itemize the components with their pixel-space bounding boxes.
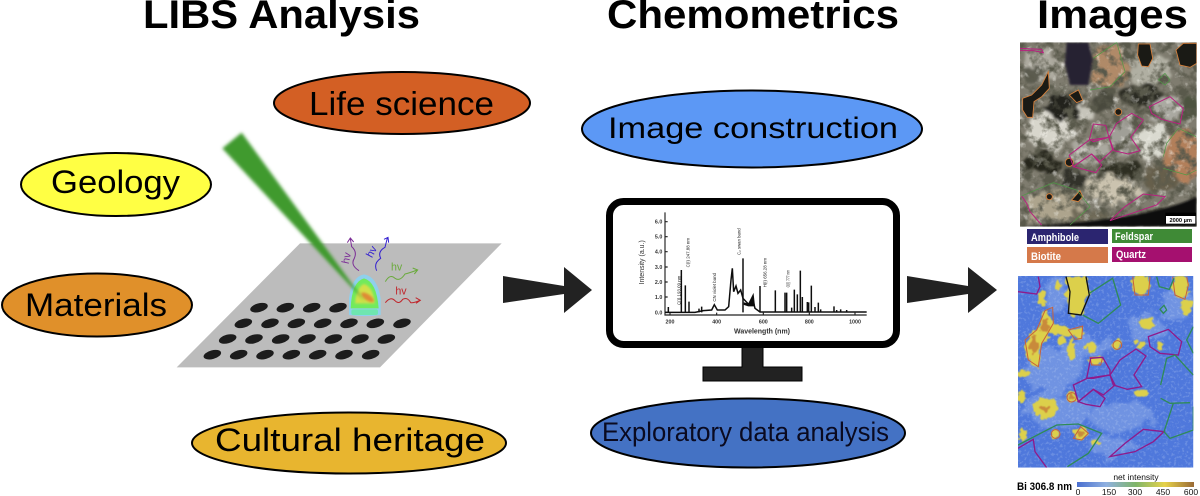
axis numbers: 3.0	[655, 265, 662, 271]
peak labels: H(I) 656.28 nm	[762, 258, 768, 287]
quartz outlines	[1020, 48, 1183, 225]
axis numbers	[655, 220, 861, 326]
sample plate	[177, 243, 502, 367]
monitor stand	[703, 346, 802, 381]
peak labels: C(I) 247.88 nm	[686, 238, 692, 267]
axes	[665, 212, 867, 315]
photo mottling	[1020, 42, 1197, 227]
oval: Life science	[274, 72, 530, 134]
elemental intensity map	[1018, 274, 1193, 468]
feldspar outlines	[1022, 42, 1197, 225]
oval: Materials	[2, 274, 192, 336]
emission: hv green	[385, 261, 418, 282]
high intensity hot spots	[1018, 274, 1193, 444]
LIBS spectrum chart: Intensity (a.u.)	[639, 240, 646, 284]
hot spot cores	[1030, 319, 1084, 436]
legend: mineral classes	[1027, 229, 1192, 263]
spectrum trace	[665, 258, 867, 312]
legend: Biotite	[1027, 247, 1108, 263]
legend: Feldspar	[1112, 229, 1192, 243]
gradient bar	[1077, 482, 1194, 487]
ablation craters	[203, 301, 412, 361]
feldspar outlines	[1018, 277, 1193, 467]
dark amphibole patch	[1065, 42, 1093, 85]
oval: Exploratory data analysis: Exploratory data analysis	[602, 417, 889, 447]
photo tone patches	[1022, 47, 1200, 223]
emission: hv purple	[340, 238, 359, 271]
peak labels: O(I) 777 nm	[785, 270, 791, 287]
amphibole outline	[1066, 277, 1089, 315]
axis numbers: 800	[805, 320, 814, 326]
oval: Exploratory data analysis	[591, 398, 905, 468]
axis numbers: 2.0	[655, 280, 662, 286]
scale ticks	[1076, 487, 1198, 496]
emission: hv blue	[364, 237, 389, 271]
biotite grains	[1023, 43, 1197, 202]
LIBS illustration: sample plate with laser and plasma	[177, 133, 502, 367]
legend: Amphibole	[1027, 229, 1108, 244]
axis numbers: 6.0	[655, 220, 662, 226]
lighter scatter regions	[1023, 277, 1193, 456]
computer monitor with spectrum	[610, 202, 896, 381]
mineral photograph with outlines	[1020, 42, 1200, 227]
biotite outlines	[1025, 277, 1188, 440]
emission: hv green: hv	[391, 261, 403, 273]
oval: Geology: Geology	[51, 164, 180, 200]
quartz outlines	[1018, 277, 1182, 468]
peak labels: C₂ swan band	[737, 228, 743, 255]
element label: Bi 306.8 nm	[1017, 481, 1072, 493]
plasma plume	[349, 274, 381, 316]
image corner shadow	[1020, 197, 1197, 227]
speckle texture	[1018, 276, 1193, 468]
LIBS spectrum chart	[639, 212, 867, 335]
axis numbers: 0.0	[655, 310, 662, 316]
axis numbers: 200	[666, 320, 674, 326]
dark mineral mottling	[1020, 42, 1197, 227]
axis numbers: 600	[759, 320, 768, 326]
arrow: LIBS to chemometrics	[503, 267, 592, 313]
legend: Biotite: Biotite	[1031, 251, 1061, 263]
scale bar: 2000 µm	[1169, 218, 1192, 224]
oval: Cultural heritage: Cultural heritage	[215, 422, 485, 458]
emission: hv blue: hv	[364, 244, 380, 260]
axis numbers: 4.0	[655, 250, 662, 256]
axis numbers: 1.0	[655, 295, 662, 301]
scale bar	[1165, 213, 1196, 224]
legend: Amphibole: Amphibole	[1031, 232, 1079, 244]
legend: Quartz: Quartz	[1116, 249, 1146, 261]
axis numbers: 1000	[849, 320, 861, 326]
oval: Materials: Materials	[25, 287, 167, 323]
axis titles: Wavelength (nm)	[734, 328, 790, 335]
arrow: chemometrics to images	[907, 267, 997, 313]
oval: Image construction: Image construction	[608, 112, 898, 145]
scale title: net intensity	[1113, 472, 1159, 482]
axis numbers: 5.0	[655, 235, 662, 241]
emission: hv red: hv	[395, 285, 407, 297]
legend: Feldspar: Feldspar	[1115, 231, 1154, 243]
oval: Geology	[21, 153, 211, 216]
peak labels: C(I) 193.09 nm	[677, 276, 683, 305]
emission: hv purple: hv	[340, 251, 354, 265]
monitor frame	[610, 202, 896, 344]
color scale: Bi 306.8 nm net intensity	[1017, 472, 1198, 496]
emission: hv red	[385, 285, 420, 303]
peak labels	[677, 228, 791, 305]
laser beam	[222, 133, 365, 302]
legend: Quartz	[1112, 247, 1192, 262]
peak labels: CN violet band	[712, 273, 718, 302]
oval: Cultural heritage	[192, 412, 506, 474]
axis numbers: 400	[712, 320, 721, 326]
oval: Image construction	[582, 90, 922, 168]
oval: Life science: Life science	[309, 85, 494, 122]
